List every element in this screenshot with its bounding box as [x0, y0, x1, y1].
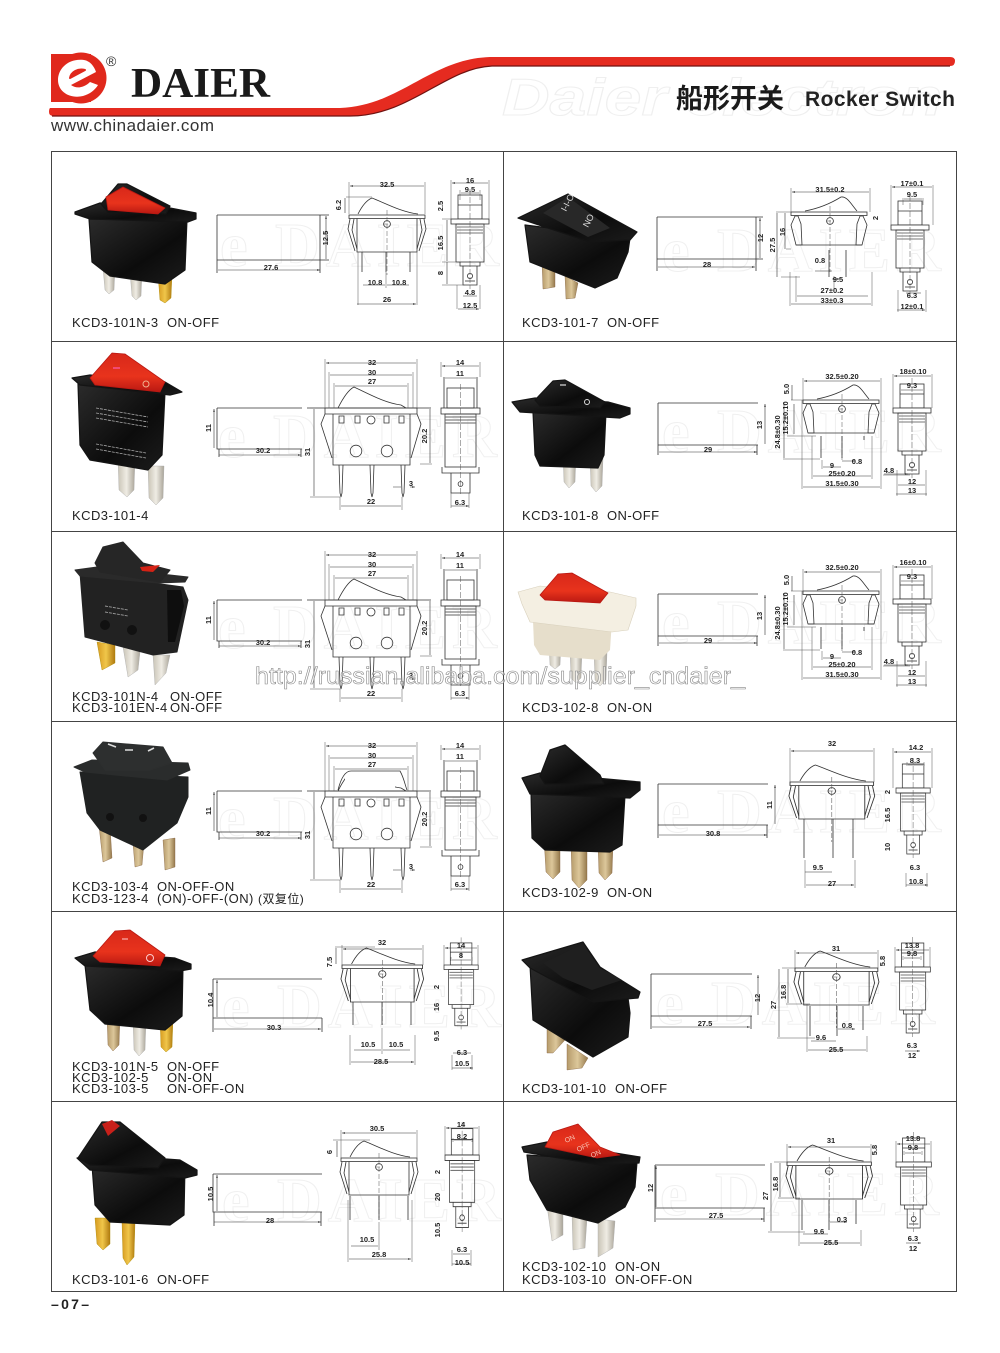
end drawing: 16 — [466, 176, 474, 185]
cutout dimension: e DAIER — [662, 778, 947, 846]
side drawing: 27 — [761, 1192, 770, 1200]
side drawing: 9.6 — [814, 1227, 824, 1236]
end drawing: 10.5 — [455, 1258, 469, 1267]
label: KCD3-101-6 — [72, 1272, 149, 1287]
end drawing — [891, 179, 933, 312]
photo: black switch tilted: I-I-O — [559, 192, 576, 213]
cutout dimension: 28 — [703, 260, 711, 269]
photo: black three-position switch — [74, 742, 190, 870]
photo: switch with red rocker and rating text — [72, 353, 182, 505]
side drawing: 31 — [827, 1136, 835, 1145]
label: ON-OFF — [170, 689, 223, 704]
end drawing: 17±0.1 — [901, 179, 923, 188]
cutout dimension: 30.2 — [256, 446, 270, 455]
end drawing: 8.2 — [457, 1132, 467, 1141]
end drawing — [883, 367, 932, 496]
label: (ON)-OFF-(ON) — [157, 891, 254, 906]
side drawing: 16.8 — [771, 1177, 780, 1191]
end drawing: 20 — [433, 1193, 442, 1201]
watermark: supplier URL: http://russian.alibaba.com/supplier_cndaier_ — [255, 663, 746, 690]
end drawing: 6.3 — [907, 291, 917, 300]
end drawing — [441, 550, 480, 700]
label: KCD3-102-10 — [522, 1259, 606, 1274]
label: ON-OFF-ON — [615, 1272, 693, 1287]
side drawing: 31.5±0.30 — [825, 670, 859, 679]
cutout dimension: 30.2 — [256, 829, 270, 838]
end drawing: 16.5 — [436, 236, 445, 250]
panel: KCD3-101-6 — [72, 1120, 507, 1287]
side drawing — [303, 741, 432, 893]
end drawing: 12 — [908, 668, 916, 677]
page number: –07– — [51, 1296, 89, 1312]
end drawing: 6.3 — [910, 863, 920, 872]
cutout dimension: 10.4 — [206, 992, 215, 1007]
end drawing: 6.3 — [455, 880, 465, 889]
side drawing: 31 — [303, 448, 312, 456]
side drawing: 25.8 — [372, 1250, 386, 1259]
side drawing: 2 — [871, 216, 880, 220]
cutout dimension: e DAIER — [220, 212, 505, 280]
end drawing: 14 — [456, 741, 465, 750]
cutout dimension: 28 — [266, 1216, 274, 1225]
side drawing: 30 — [368, 368, 376, 377]
side drawing: 30 — [368, 560, 376, 569]
side drawing: 15.2±0.10 — [781, 401, 790, 435]
label: ON-OFF — [167, 1059, 220, 1074]
end drawing: 11 — [456, 369, 464, 378]
side drawing: 32 — [368, 358, 376, 367]
side drawing: 26 — [383, 295, 391, 304]
photo: black switch with red tip — [77, 1120, 197, 1265]
end drawing: 4.8 — [884, 657, 894, 666]
side drawing: 24.8±0.30 — [773, 606, 782, 640]
side drawing: 25±0.20 — [828, 469, 856, 478]
label: KCD3-101N-5 — [72, 1059, 159, 1074]
label: KCD3-102-8 — [522, 700, 599, 715]
cutout dimension: 11 — [204, 424, 213, 432]
side drawing — [303, 550, 432, 702]
cutout dimension: 11 — [204, 616, 213, 624]
side drawing: 32 — [368, 550, 376, 559]
cutout dimension: 11 — [204, 807, 213, 815]
panel: KCD3-101-8 — [512, 367, 947, 523]
end drawing — [883, 743, 932, 887]
label: ON-OFF — [167, 315, 220, 330]
end drawing: 9.5 — [465, 185, 475, 194]
side drawing: 20.2 — [420, 812, 429, 826]
label: ON-ON — [615, 1259, 661, 1274]
label: ON-OFF — [607, 508, 660, 523]
panel: KCD3-103-4 and KCD3-123-4 — [72, 741, 503, 906]
side drawing: 31 — [832, 944, 840, 953]
watermark: Daier electron: Daier electron — [502, 69, 942, 127]
end drawing: 2 — [432, 985, 441, 989]
end drawing: 2.5 — [436, 201, 445, 211]
side drawing: 27 — [769, 1001, 778, 1009]
photo: black switch — [522, 745, 640, 888]
label: KCD3-123-4 — [72, 891, 149, 906]
panel: KCD3-101-4 — [72, 353, 503, 523]
side drawing — [334, 180, 426, 305]
side drawing: 0.8 — [842, 1021, 852, 1030]
side drawing: 0.8 — [815, 256, 825, 265]
cutout dimension: e DAIER — [218, 785, 503, 853]
label: ON-OFF — [170, 700, 223, 715]
photo: black switch with red marked rocker: OFF — [576, 1142, 592, 1154]
side drawing: 27 — [828, 879, 836, 888]
cutout dimension: 12 — [753, 994, 762, 1002]
side drawing: 31 — [303, 831, 312, 839]
cutout dimension: 30.8 — [706, 829, 720, 838]
cutout dimension: 27.5 — [709, 1211, 723, 1220]
end drawing — [883, 558, 932, 687]
side drawing: 10.5 — [389, 1040, 403, 1049]
header: brand and page title — [49, 52, 955, 135]
photo: black switch with red marked rocker — [522, 1124, 640, 1257]
end drawing: 2 — [433, 1170, 442, 1174]
side drawing: 31.5±0.2 — [815, 185, 845, 194]
side drawing — [303, 358, 432, 510]
cutout dimension: e DAIER — [662, 589, 947, 657]
side drawing: 6.2 — [334, 200, 343, 210]
cutout dimension: 12 — [646, 1184, 655, 1192]
side drawing: 7.5 — [325, 957, 334, 967]
side drawing — [761, 1136, 879, 1247]
label: ON-ON — [167, 1070, 213, 1085]
cutout dimension: e DAIER — [656, 970, 941, 1038]
end drawing: 10 — [883, 843, 892, 851]
cutout dimension: e DAIER — [222, 973, 507, 1041]
side drawing: 5.8 — [878, 956, 887, 966]
label: ON-OFF — [607, 315, 660, 330]
side drawing: 31.5±0.30 — [825, 479, 859, 488]
end drawing — [432, 937, 478, 1070]
cutout dimension: 29 — [704, 445, 712, 454]
label: ON-OFF-ON — [157, 879, 235, 894]
label: KCD3-101-4 — [72, 508, 149, 523]
label: KCD3-102-9 — [522, 885, 599, 900]
end drawing: 6.3 — [455, 498, 465, 507]
end drawing: 9.5 — [432, 1031, 441, 1041]
label: ON-OFF-ON — [167, 1081, 245, 1096]
side drawing: 0.3 — [837, 1215, 847, 1224]
photo: white switch with red rocker — [518, 573, 636, 686]
photo: black switch tilted: NO — [581, 212, 596, 229]
side drawing: 22 — [367, 880, 375, 889]
end drawing: 14 — [457, 941, 466, 950]
cutout dimension: 10.5 — [206, 1187, 215, 1201]
side drawing: 22 — [367, 497, 375, 506]
end drawing: 18±0.10 — [899, 367, 927, 376]
photo: black switch with red marked rocker: ON — [590, 1149, 602, 1160]
panel: KCD3-102-8 — [518, 558, 947, 715]
cutout dimension: 11 — [765, 801, 774, 809]
panel: KCD3-101-7 — [518, 179, 947, 330]
side drawing: 28.5 — [374, 1057, 388, 1066]
side drawing — [773, 563, 881, 680]
side drawing: 27 — [368, 760, 376, 769]
end drawing: 16±0.10 — [899, 558, 927, 567]
label: KCD3-101-7 — [522, 315, 599, 330]
label: ON-ON — [607, 885, 653, 900]
side drawing — [325, 938, 424, 1066]
side drawing: 9.5 — [813, 863, 823, 872]
label: ON-OFF — [157, 1272, 210, 1287]
label: KCD3-101EN-4 — [72, 700, 168, 715]
panel: KCD3-102-9 — [522, 739, 947, 900]
end drawing: 8.3 — [910, 756, 920, 765]
icon: Daier e logo: ® — [106, 53, 117, 69]
brand name: DAIER — [131, 61, 271, 107]
label: KCD3-101N-4 — [72, 689, 159, 704]
cutout dimension: 30.2 — [256, 638, 270, 647]
cutout dimension: 13 — [755, 612, 764, 620]
end drawing: 9.5 — [907, 190, 917, 199]
side drawing: 9 — [830, 652, 834, 661]
website: www.chinadaier.com — [50, 116, 214, 135]
end drawing: 9.3 — [907, 572, 917, 581]
label: ON-OFF — [615, 1081, 668, 1096]
end drawing — [441, 741, 480, 891]
label: KCD3-102-5 — [72, 1070, 149, 1085]
end drawing: 13 — [908, 486, 916, 495]
cutout dimension: 12.5 — [321, 231, 330, 245]
end drawing: 12.5 — [463, 301, 477, 310]
side drawing — [789, 739, 875, 888]
side drawing: 5.8 — [870, 1145, 879, 1155]
side drawing: 5.0 — [782, 575, 791, 585]
photo: switch with red rocker — [75, 930, 191, 1056]
cutout dimension: 27.5 — [698, 1019, 712, 1028]
end drawing: 16.5 — [883, 808, 892, 822]
cutout dimension: e DAIER — [662, 217, 947, 285]
cutout dimension: e DAIER — [662, 398, 947, 466]
side drawing: 3 — [409, 862, 413, 871]
label: KCD3-101N-3 — [72, 315, 159, 330]
end drawing: 14 — [456, 550, 465, 559]
end drawing — [441, 358, 480, 508]
side drawing: 10.8 — [368, 278, 382, 287]
side drawing: 30.5 — [370, 1124, 384, 1133]
photo: black switch with red indicator — [75, 542, 188, 685]
side drawing: 30 — [368, 751, 376, 760]
end drawing: 12 — [908, 1051, 916, 1060]
red swoosh band — [49, 57, 955, 116]
cutout dimension: e DAIER — [222, 1167, 507, 1235]
title Chinese: 船形开关 — [676, 77, 784, 116]
end drawing: 9.8 — [908, 1143, 918, 1152]
end drawing: 12 — [909, 1244, 917, 1253]
end drawing: 10.5 — [455, 1059, 469, 1068]
side drawing: 32.5±0.20 — [825, 563, 859, 572]
side drawing: 0.8 — [852, 457, 862, 466]
title English: Rocker Switch — [805, 88, 955, 111]
end drawing: 14 — [457, 1120, 466, 1129]
end drawing — [433, 1120, 479, 1267]
end drawing: 16 — [432, 1003, 441, 1011]
end drawing: 6.3 — [908, 1234, 918, 1243]
photo: black switch tilted — [522, 942, 640, 1070]
side drawing — [769, 944, 887, 1054]
end drawing: 10.5 — [433, 1223, 442, 1237]
end drawing: 13.8 — [906, 1134, 920, 1143]
side drawing: 10.5 — [361, 1040, 375, 1049]
end drawing: 12 — [908, 477, 916, 486]
side drawing — [325, 1124, 418, 1262]
side drawing: 25±0.20 — [828, 660, 856, 669]
end drawing: 13.8 — [905, 941, 919, 950]
side drawing: 24.8±0.30 — [773, 415, 782, 449]
end drawing: 6.3 — [457, 1048, 467, 1057]
side drawing — [773, 372, 881, 489]
side drawing: 20.2 — [420, 429, 429, 443]
icon: Daier e logo — [51, 52, 117, 104]
side drawing: 32.5±0.20 — [825, 372, 859, 381]
side drawing: 32.5 — [380, 180, 394, 189]
side drawing: 9.6 — [816, 1033, 826, 1042]
side drawing: 15.2±0.10 — [781, 592, 790, 626]
end drawing: 4.8 — [465, 288, 475, 297]
side drawing: 33±0.3 — [821, 296, 843, 305]
end drawing: 14.2 — [909, 743, 923, 752]
label: KCD3-103-5 — [72, 1081, 149, 1096]
side drawing: 16 — [778, 228, 787, 236]
side drawing: 27 — [368, 377, 376, 386]
label: KCD3-103-10 — [522, 1272, 606, 1287]
cutout dimension: 13 — [755, 421, 764, 429]
cutout dimension: 29 — [704, 636, 712, 645]
photo: black switch tilted — [518, 192, 637, 299]
side drawing: 31 — [303, 640, 312, 648]
cutout dimension: e DAIER — [660, 1161, 945, 1229]
end drawing: 11 — [456, 752, 464, 761]
end drawing: 8 — [459, 951, 463, 960]
side drawing: 32 — [378, 938, 386, 947]
side drawing: 9.5 — [833, 275, 843, 284]
side drawing: 32 — [368, 741, 376, 750]
label: KCD3-101-10 — [522, 1081, 606, 1096]
side drawing: 9 — [830, 461, 834, 470]
label: ON-ON — [607, 700, 653, 715]
end drawing: 11 — [456, 561, 464, 570]
side drawing: 27.5 — [768, 238, 777, 252]
cutout dimension: 30.3 — [267, 1023, 281, 1032]
side drawing: 10.5 — [360, 1235, 374, 1244]
panel: KCD3-101N-5, 102-5, 103-5 — [72, 930, 507, 1096]
cutout dimension: 12 — [756, 234, 765, 242]
side drawing: 0.8 — [852, 648, 862, 657]
side drawing: 27±0.2 — [821, 286, 843, 295]
side drawing: 5.0 — [782, 384, 791, 394]
panel: KCD3-101N-3 — [72, 176, 505, 330]
end drawing: 14 — [456, 358, 465, 367]
end drawing — [895, 937, 930, 1060]
side drawing: 6 — [325, 1150, 334, 1154]
photo: black switch with white markings — [512, 380, 630, 492]
end drawing: 13 — [908, 677, 916, 686]
end drawing — [896, 1132, 931, 1253]
cutout dimension: e DAIER — [218, 403, 503, 471]
side drawing — [768, 185, 880, 306]
product grid frame — [52, 152, 956, 1292]
side drawing: 25.5 — [829, 1045, 843, 1054]
end drawing: 10.8 — [909, 877, 923, 886]
panel: KCD3-101N-4 and KCD3-101EN-4 — [72, 542, 503, 715]
side drawing: 3 — [409, 479, 413, 488]
side drawing: 27 — [368, 569, 376, 578]
end drawing: 8 — [436, 271, 445, 275]
end drawing: 6.3 — [455, 689, 465, 698]
label: (双复位) — [258, 891, 304, 906]
end drawing: 6.3 — [457, 1245, 467, 1254]
end drawing: 2 — [883, 790, 892, 794]
end drawing: 6.3 — [907, 1041, 917, 1050]
end drawing — [436, 176, 489, 310]
label: KCD3-101-8 — [522, 508, 599, 523]
side drawing: 16.8 — [779, 985, 788, 999]
panel: KCD3-101-10 — [522, 937, 941, 1096]
end drawing: 9.3 — [907, 381, 917, 390]
end drawing: 12±0.1 — [901, 302, 923, 311]
side drawing: 25.5 — [824, 1238, 838, 1247]
side drawing: 3 — [409, 671, 413, 680]
side drawing: 22 — [367, 689, 375, 698]
label: KCD3-103-4 — [72, 879, 149, 894]
side drawing: 32 — [828, 739, 836, 748]
side drawing: 20.2 — [420, 621, 429, 635]
cutout dimension: 27.6 — [264, 263, 278, 272]
end drawing: 4.8 — [884, 466, 894, 475]
end drawing: 9.8 — [907, 949, 917, 958]
photo: switch with red rocker — [75, 184, 196, 303]
side drawing: 10.8 — [392, 278, 406, 287]
photo: black switch with red marked rocker: ON — [564, 1134, 576, 1145]
panel: KCD3-102-10 and KCD3-103-10 — [522, 1124, 945, 1287]
cutout dimension: e DAIER — [218, 594, 503, 662]
